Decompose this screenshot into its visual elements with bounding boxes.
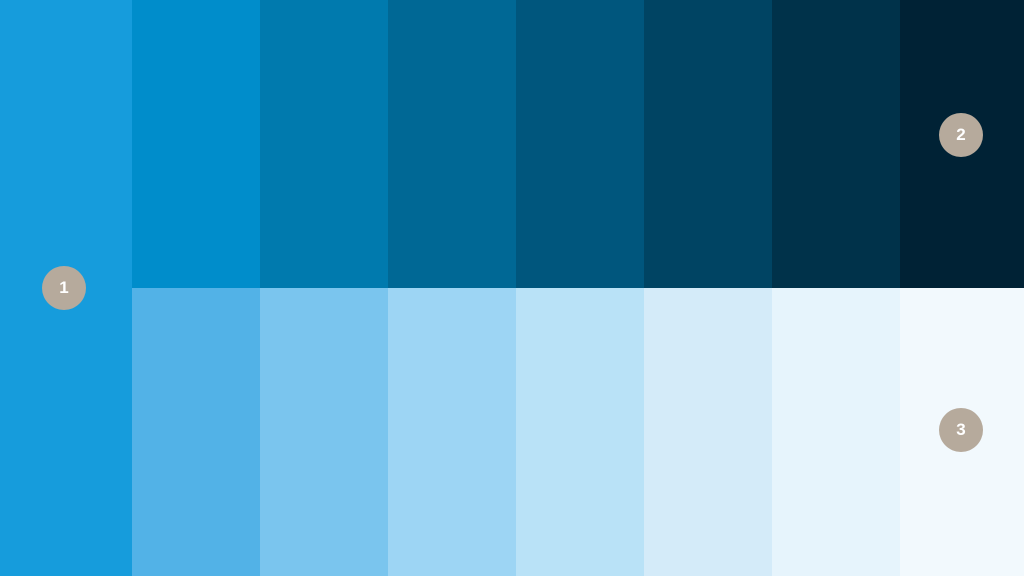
row: light tints	[132, 288, 1024, 576]
marker 1: 1	[59, 278, 69, 297]
swatch: primary blue	[0, 0, 132, 576]
row: dark shades	[132, 0, 1024, 288]
marker 2: 2	[956, 125, 966, 144]
marker 3: 3	[956, 420, 966, 439]
marker 2	[939, 113, 983, 157]
marker 1	[42, 266, 86, 310]
marker 3	[939, 408, 983, 452]
